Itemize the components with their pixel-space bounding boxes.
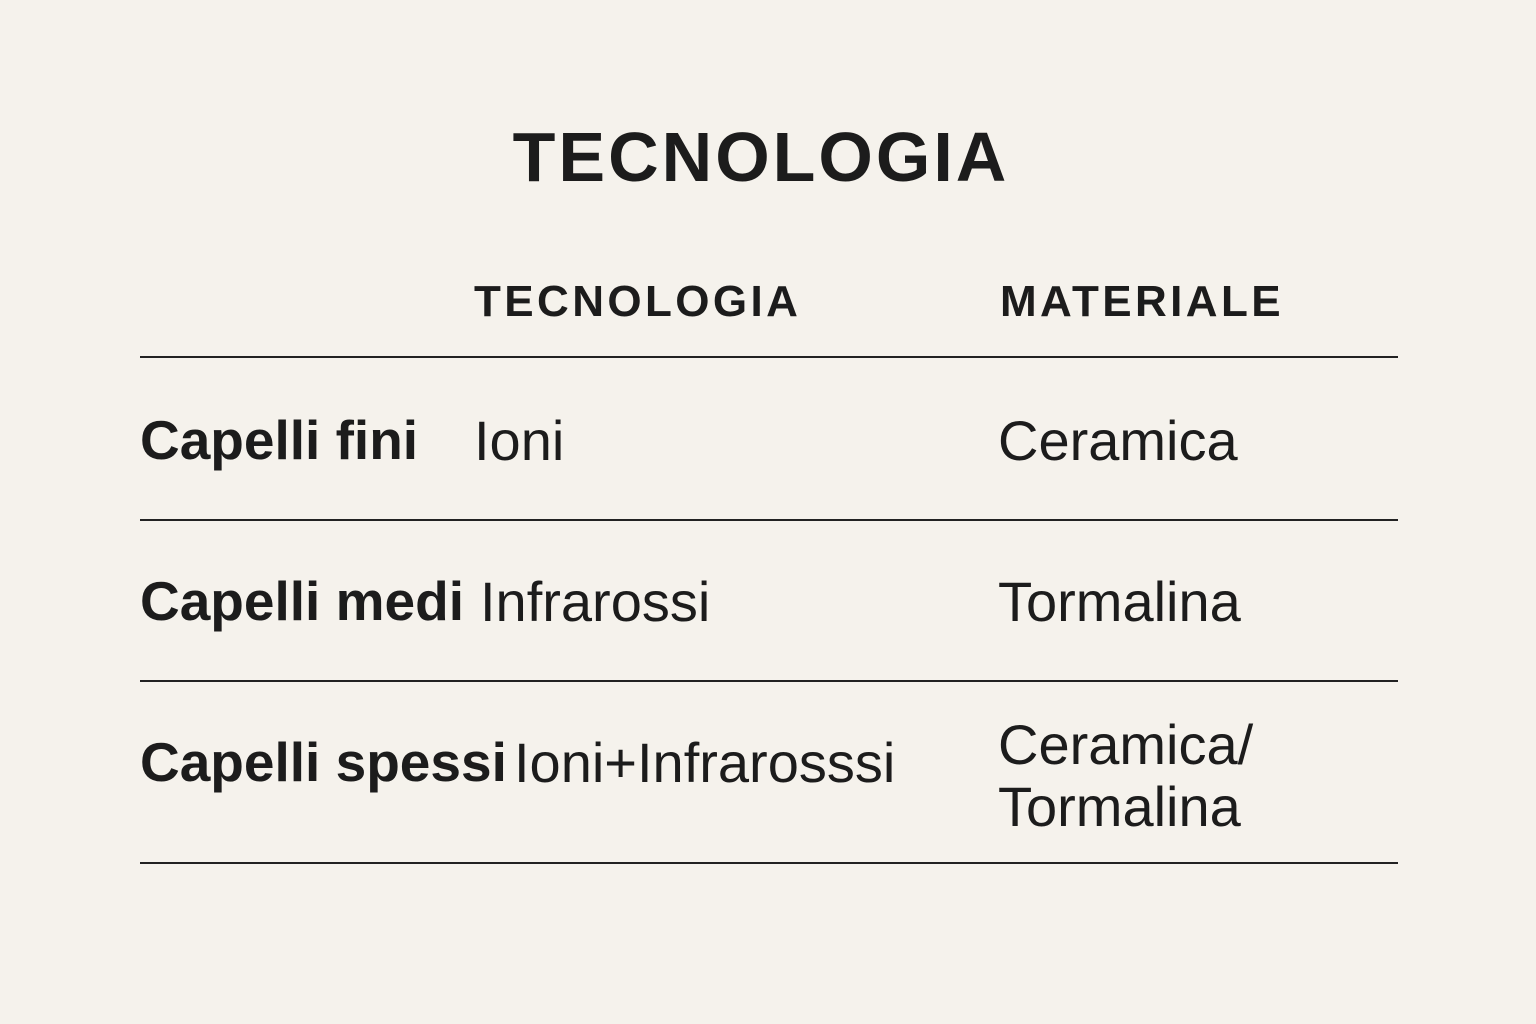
row: capelli medi	[140, 570, 1241, 633]
label: Capelli fini	[140, 409, 418, 471]
title: TECNOLOGIA	[513, 118, 1009, 196]
material: Tormalina	[998, 775, 1241, 838]
technology: Ioni	[474, 409, 564, 472]
header: materiale: MATERIALE	[1000, 277, 1284, 326]
material: Ceramica/	[998, 713, 1253, 776]
material: Ceramica	[998, 409, 1238, 472]
label: Capelli spessi	[140, 731, 507, 793]
row: capelli spessi	[140, 713, 1254, 838]
header: tecnologia: TECNOLOGIA	[474, 277, 801, 326]
row: capelli fini	[140, 409, 1238, 472]
material: Tormalina	[998, 570, 1241, 633]
technology: Ioni+Infrarosssi	[514, 731, 895, 794]
material	[998, 713, 1254, 838]
label: Capelli medi	[140, 570, 464, 632]
technology: Infrarossi	[480, 570, 710, 633]
